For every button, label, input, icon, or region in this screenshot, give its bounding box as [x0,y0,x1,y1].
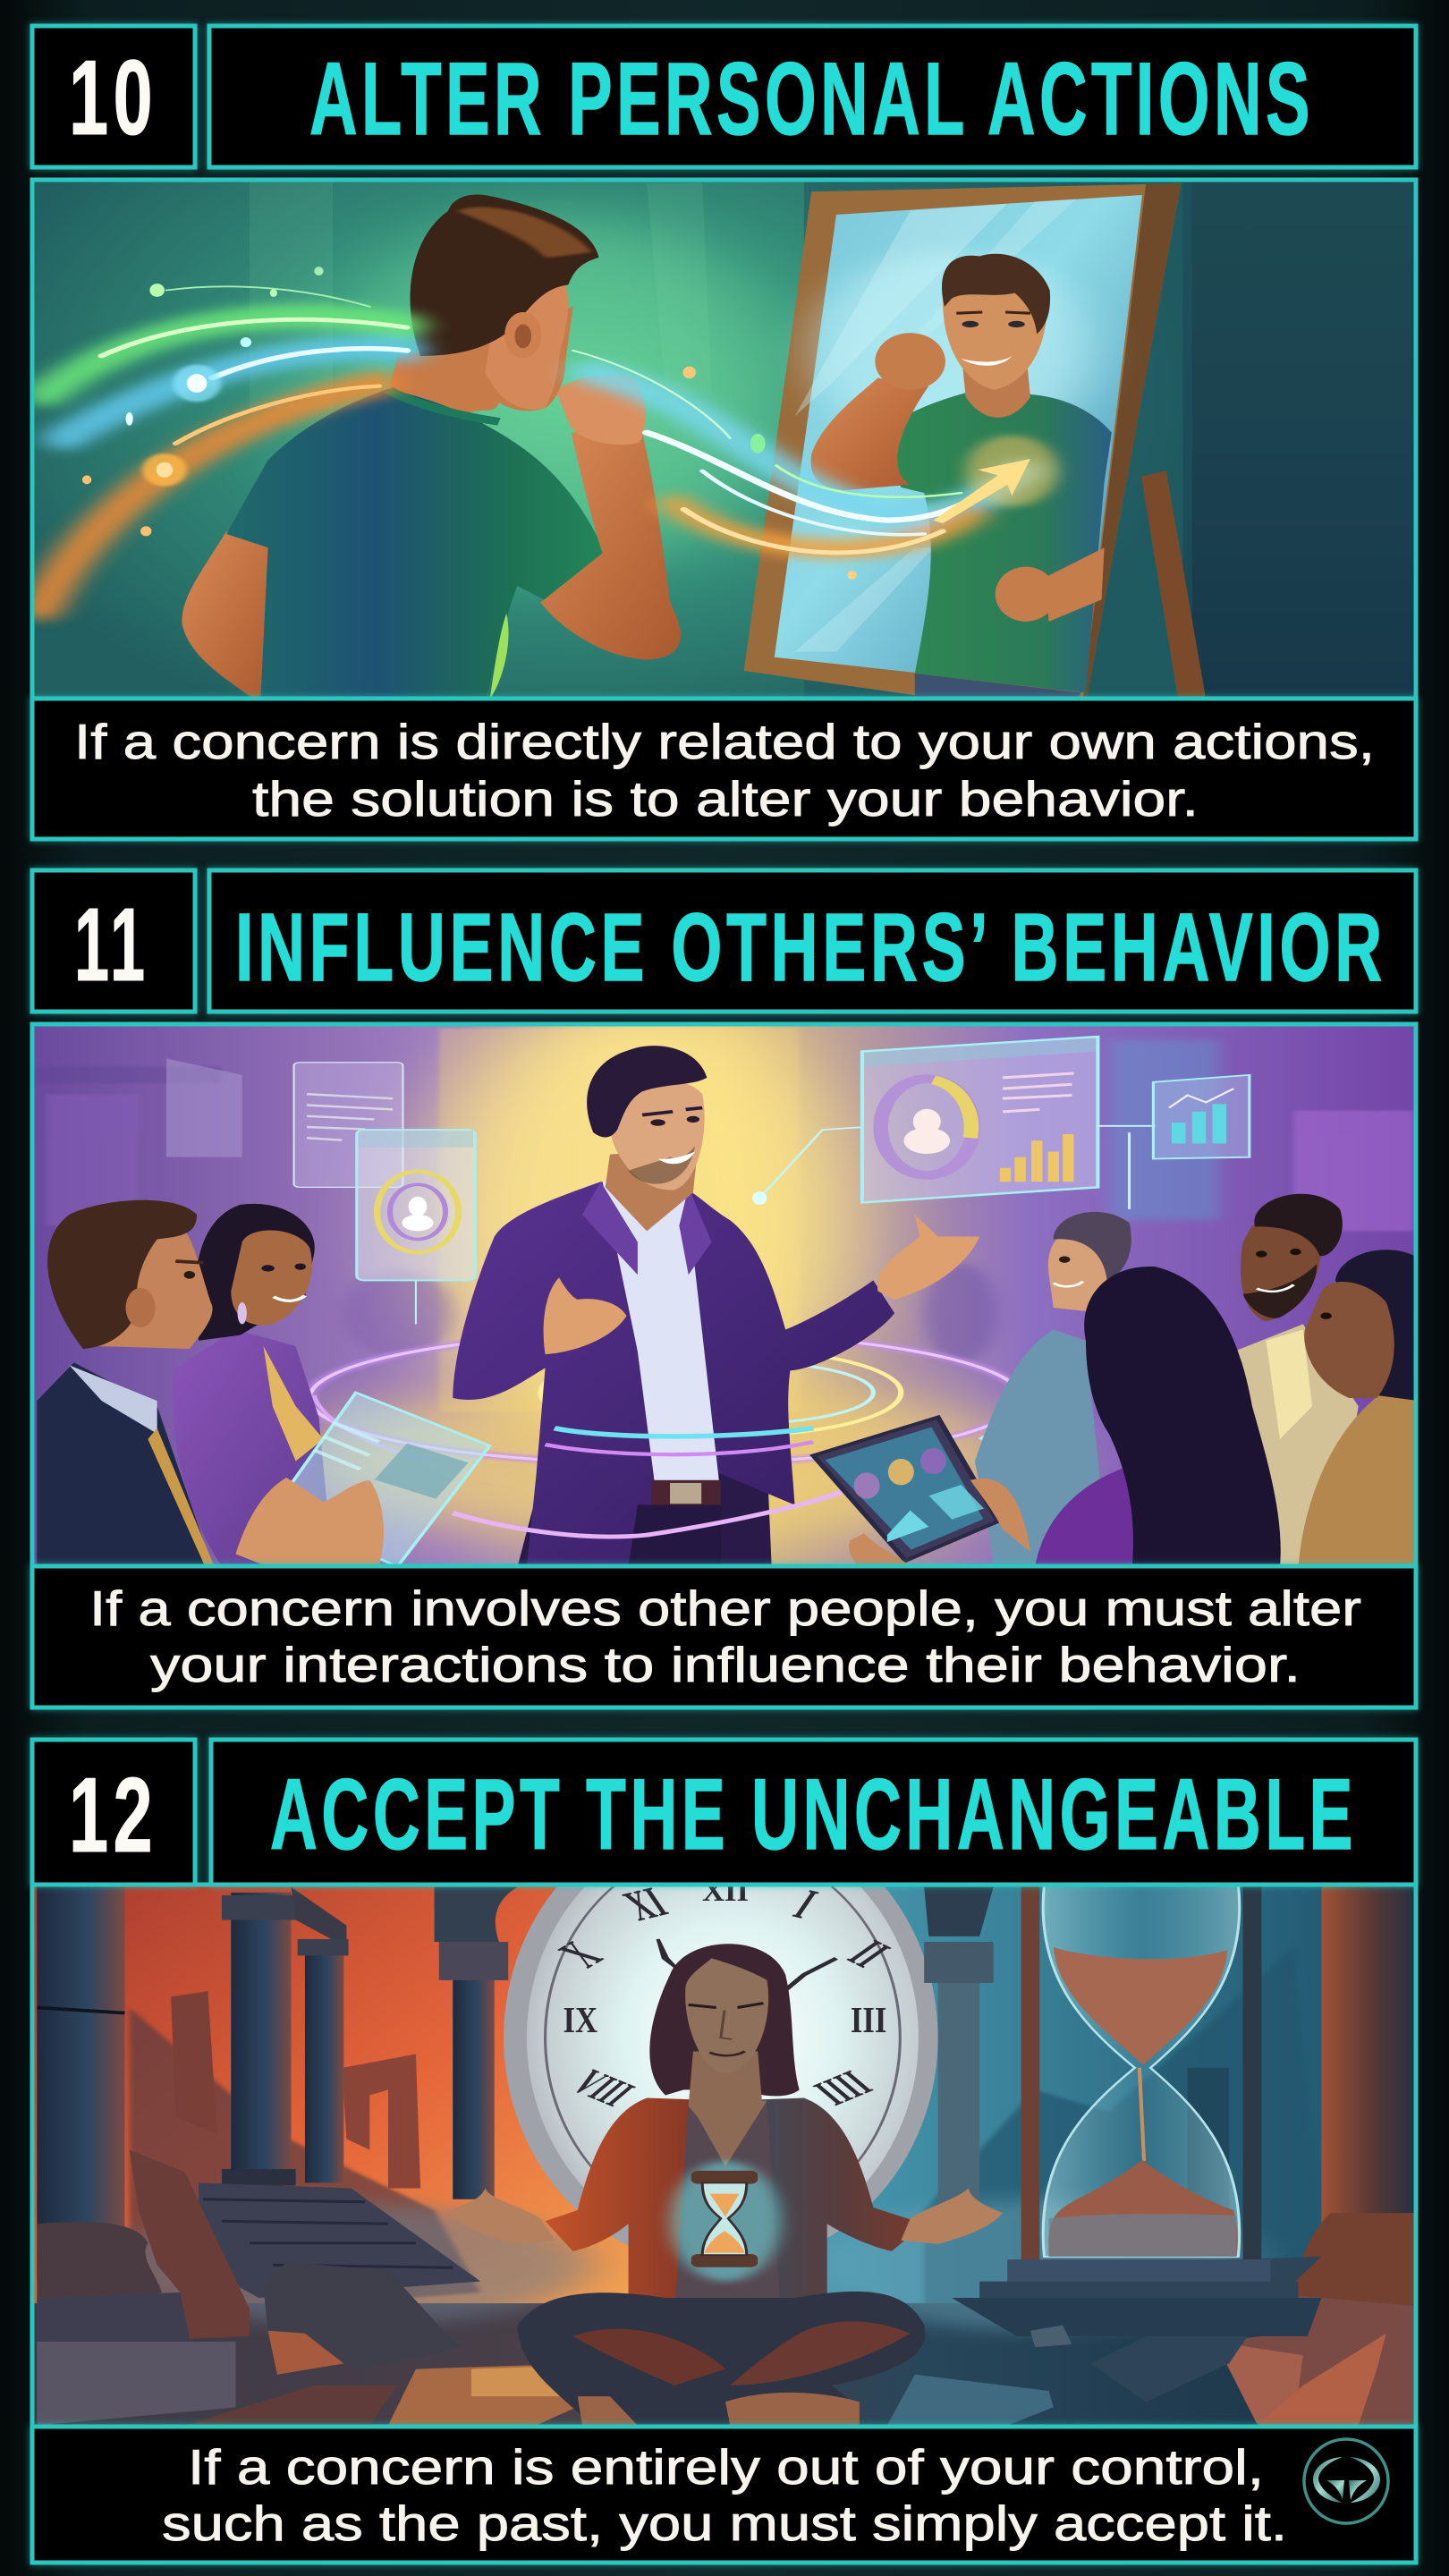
panel: 10 alter personal actions [32,26,1416,839]
giant hourglass [952,1885,1321,2347]
caption: your interactions to influence their behavior. [150,1637,1301,1692]
clock: IIII [804,2063,883,2114]
floor stones [185,2363,1054,2426]
audience right [813,1194,1419,1567]
clock: XII [702,1874,749,1908]
audience left [37,1200,490,1567]
clock: II [835,1932,902,1976]
sparkles [82,267,857,580]
caption: If a concern is directly related to your own actions, [74,714,1375,769]
energy rings front [314,1393,1022,1537]
caption: such as the past, you must simply accept it. [162,2496,1287,2551]
light streams [41,286,1021,608]
illustration: presenter with holographic screens and audience [32,1001,1419,1567]
ancient columns [37,1885,1416,2426]
clock: III [851,2000,886,2041]
caption: If a concern involves other people, you must alter [89,1580,1361,1636]
clock [504,1808,938,2267]
panel: 12 accept the unchangeable [32,1740,1416,2563]
clock: X [545,1933,615,1975]
caption [32,1566,1416,1707]
image frame [32,180,1416,699]
number box: 12 [69,1756,157,1875]
image frame [32,1885,1416,2427]
clock: I [785,1880,826,1928]
number box: 11 [74,886,149,1003]
icon: circular logo [1304,2439,1388,2523]
clock: XI [614,1877,676,1930]
glowing arrow [933,436,1058,523]
number box [32,1740,195,1885]
number box [32,26,195,167]
panel: 11 influence others' behavior [32,870,1419,1707]
holographic screens right [752,1037,1250,1209]
meditating figure [448,1944,1003,2426]
clock: VIII [561,2063,644,2114]
energy rings back [309,1333,1021,1464]
ground [32,2303,1416,2426]
reflected man [811,254,1112,699]
clock: IX [564,2000,598,2041]
holographic screens left [166,1058,475,1324]
illustration: man facing mirror with light streams [32,179,1416,699]
number box [32,870,195,1012]
number box: 10 [69,38,157,157]
caption [32,699,1416,839]
presenter [453,1046,979,1567]
mirror [744,183,1206,699]
caption: If a concern is entirely out of your control, [188,2439,1264,2495]
caption [32,2427,1416,2563]
illustration: meditating figure with clock, hourglass and ruins [32,1808,1416,2426]
caption: the solution is to alter your behavior. [252,771,1199,826]
image frame [32,1024,1416,1566]
man from behind [182,195,681,699]
